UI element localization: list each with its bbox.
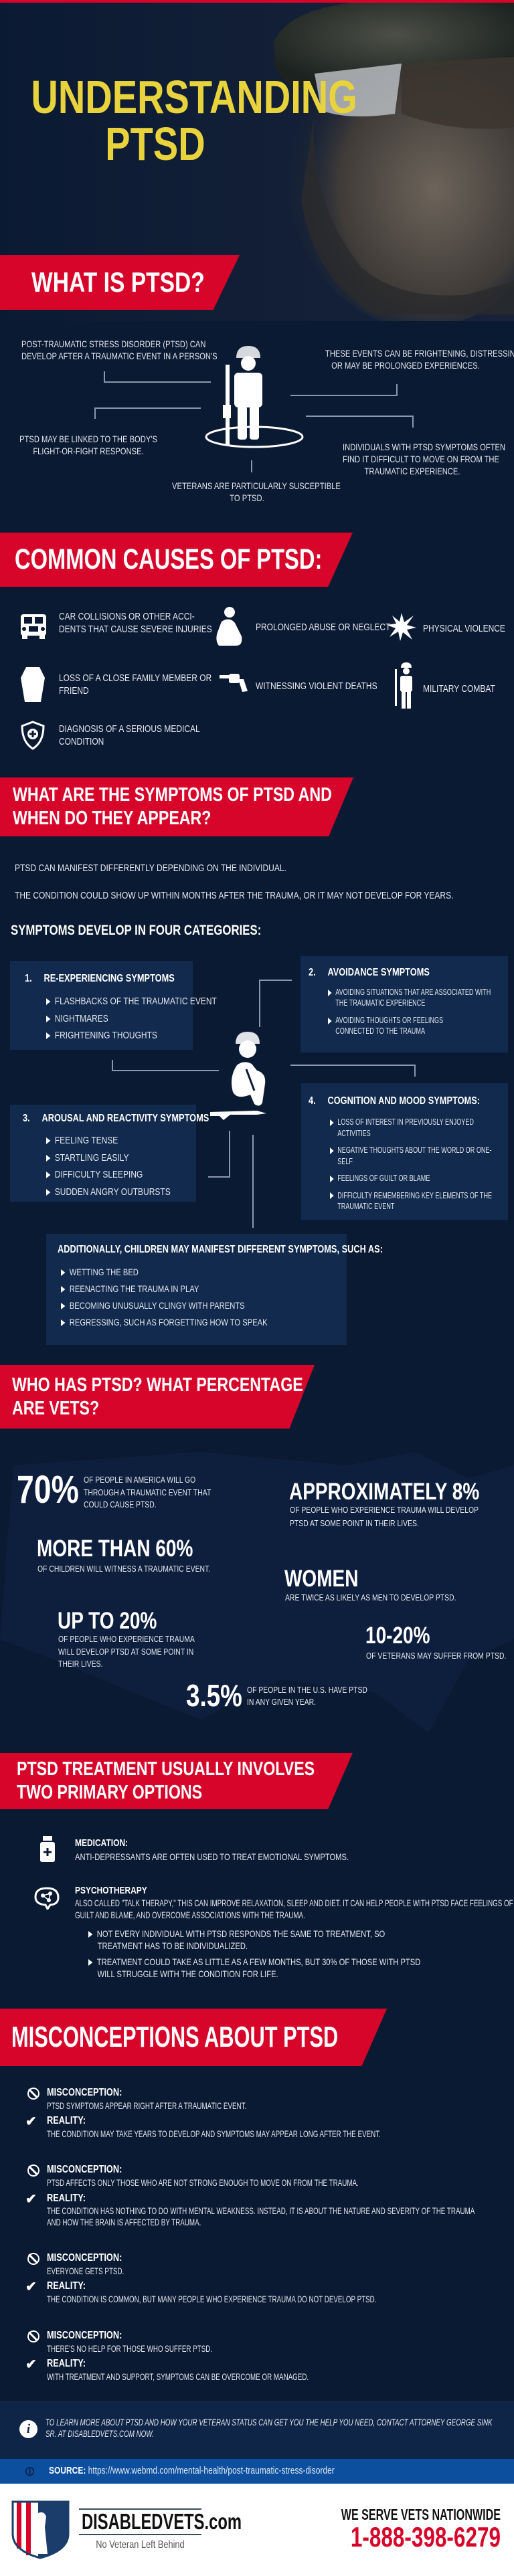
text: difficult to move on: INDIVIDUALS WITH PTSD SYMPTOMS OFTEN: [343, 442, 505, 452]
panel: re-experiencing: NIGHTMARES: [55, 1013, 108, 1024]
icon: brain head: [35, 1887, 59, 1910]
text: difficult to move on: FIND IT DIFFICULT TO MOVE ON FROM THE: [343, 454, 499, 464]
stat: 70%: OF PEOPLE IN AMERICA WILL GO: [84, 1475, 195, 1485]
text: loss: [59, 672, 211, 697]
misconception 4: WITH TREATMENT AND SUPPORT, SYMPTOMS CAN BE OVERCOME OR MANAGED.: [47, 2371, 309, 2382]
text: car collisions: DENTS THAT CAUSE SEVERE INJURIES: [59, 624, 212, 635]
map background: [0, 1452, 514, 1733]
misconception 2: THE CONDITION HAS NOTHING TO DO WITH MENTAL WEAKNESS. INSTEAD, IT IS ABOUT THE NATURE AND SEVERITY OF THE TRAUMA: [47, 2205, 475, 2216]
icon: coffin: [21, 667, 45, 702]
callout: info band: SR. AT DISABLEDVETS.COM NOW.: [46, 2428, 154, 2439]
stat: 3.5%: 3.5%: [186, 1678, 242, 1713]
icon: soldier: [395, 662, 412, 709]
icon: child: [216, 607, 242, 646]
panel: children symptoms: BECOMING UNUSUALLY CLINGY WITH PARENTS: [70, 1300, 245, 1311]
banner: symptoms: [0, 777, 353, 836]
text: definition: POST-TRAUMATIC STRESS DISORDER (PTSD) CAN: [21, 339, 205, 349]
panel: arousal: STARTLING EASILY: [55, 1152, 129, 1163]
icon: car: [21, 614, 46, 639]
text: treatment bullets: [88, 1928, 420, 1979]
text: medication: MEDICATION:: [75, 1837, 128, 1849]
misconception 1: MISCONCEPTION:: [47, 2087, 122, 2098]
stat: 10-20%: 10-20%: [365, 1623, 430, 1649]
text: diagnosis: CONDITION: [59, 736, 104, 747]
text: physical violence: PHYSICAL VIOLENCE: [423, 623, 505, 634]
text: military combat: MILITARY COMBAT: [423, 683, 495, 695]
stat: up to 20%: THEIR LIVES.: [58, 1659, 102, 1669]
icon: revolver: [220, 674, 248, 692]
misconception 2: [25, 2164, 475, 2227]
misconception 1: [25, 2087, 381, 2139]
stat: up to 20%: UP TO 20%: [58, 1608, 157, 1634]
text: psychotherapy: PSYCHOTHERAPY: [75, 1885, 147, 1896]
text: treatment bullets: TREATMENT HAS TO BE INDIVIDUALIZED. TREATMENT COULD TAKE AS LITTLE AS A FEW MONTHS, BUT 30% OF THOSE WITH PTSD: [97, 1940, 420, 1967]
logo: shield: [11, 2500, 70, 2559]
misconception 3: MISCONCEPTION:: [47, 2252, 122, 2264]
panel: what is ptsd diagram: [19, 339, 514, 503]
stat: 70%: [17, 1468, 211, 1511]
misconception 2: PTSD AFFECTS ONLY THOSE WHO ARE NOT STRONG ENOUGH TO MOVE ON FROM THE TRAUMA.: [47, 2177, 359, 2188]
misconception 3: EVERYONE GETS PTSD.: [47, 2266, 124, 2276]
text: loss: LOSS OF A CLOSE FAMILY MEMBER OR: [59, 672, 211, 684]
stat: women: WOMEN: [284, 1566, 358, 1592]
panel: avoidance: AVOIDING SITUATIONS THAT ARE ASSOCIATED WITH: [335, 987, 491, 997]
logo: wordmark: No Veteran Left Behind: [96, 2539, 185, 2551]
logo: wordmark: DISABLEDVETS.com: [82, 2509, 242, 2534]
stat: women: ARE TWICE AS LIKELY AS MEN TO DEVELOP PTSD.: [285, 1592, 456, 1602]
text: car collisions: CAR COLLISIONS OR OTHER ACCI-: [59, 611, 195, 622]
icon: explosion: [387, 613, 416, 641]
footer: [0, 2484, 514, 2576]
logo: wordmark: [79, 2508, 201, 2562]
text: difficult to move on: TRAUMATIC EXPERIENCE.: [365, 466, 460, 476]
banner: misconceptions: [0, 2009, 387, 2066]
stat: 70%: COULD CAUSE PTSD.: [84, 1499, 157, 1509]
panel: children symptoms: ADDITIONALLY, CHILDREN MAY MANIFEST DIFFERENT SYMPTOMS, SUCH AS:: [58, 1244, 383, 1255]
text: symptoms intro: THE CONDITION COULD SHOW UP WITHIN MONTHS AFTER THE TRAUMA, OR IT MAY NOT DEVELOP FOR YEARS.: [15, 890, 453, 901]
heading: four categories: SYMPTOMS DEVELOP IN FOUR CATEGORIES:: [11, 923, 261, 938]
banner: who has ptsd: WHO HAS PTSD? WHAT PERCENTAGE: [12, 1374, 303, 1396]
panel: arousal: SUDDEN ANGRY OUTBURSTS: [55, 1186, 171, 1198]
misconception 1: THE CONDITION MAY TAKE YEARS TO DEVELOP AND SYMPTOMS MAY APPEAR LONG AFTER THE EVENT.: [47, 2128, 381, 2139]
icon: medical shield: [21, 721, 44, 750]
misconception 2: MISCONCEPTION:: [47, 2164, 122, 2175]
panel: cognition and mood: TRAUMATIC EVENT: [337, 1201, 394, 1211]
stat: 10-20%: OF VETERANS MAY SUFFER FROM PTSD.: [366, 1651, 506, 1661]
text: flight or fight: [19, 434, 157, 456]
title: [31, 71, 357, 170]
stat: 3.5%: OF PEOPLE IN THE U.S. HAVE PTSD: [247, 1685, 367, 1695]
stat: approximately 8%: PTSD AT SOME POINT IN THEIR LIVES.: [290, 1518, 419, 1528]
panel: arousal: DIFFICULTY SLEEPING: [55, 1169, 143, 1180]
text: psychotherapy: ALSO CALLED "TALK THERAPY," THIS CAN IMPROVE RELAXATION, SLEEP AND DIET. IT CAN HELP PEOPLE WITH PTSD FACE FEELINGS OF: [75, 1898, 513, 1908]
contact: WE SERVE VETS NATIONWIDE: [341, 2506, 501, 2523]
banner: symptoms: WHEN DO THEY APPEAR?: [13, 808, 211, 829]
stat: more than 60%: [37, 1536, 210, 1574]
banner: treatment: [0, 1753, 353, 1809]
panel: cognition and mood: DIFFICULTY REMEMBERING KEY ELEMENTS OF THE: [337, 1190, 492, 1200]
callout: info band: TO LEARN MORE ABOUT PTSD AND HOW YOUR VETERAN STATUS CAN GET YOU THE HELP YOU NEED, CONTACT ATTORNEY GEORGE SINK: [46, 2417, 493, 2427]
stat: 3.5%: [186, 1678, 367, 1713]
panel: re-experiencing: FLASHBACKS OF THE TRAUMATIC EVENT: [55, 996, 217, 1007]
panel: arousal: FEELING TENSE: [55, 1135, 118, 1146]
panel: avoidance: [301, 956, 508, 1052]
misconception 3: REALITY:: [47, 2280, 86, 2292]
stat: up to 20%: OF PEOPLE WHO EXPERIENCE TRAUMA: [58, 1634, 195, 1644]
misconception 2: ✔: [25, 2192, 37, 2207]
text: symptoms intro: [15, 862, 453, 901]
banner: common causes: [0, 533, 353, 587]
banner: what is ptsd: [0, 255, 240, 310]
text: veterans: TO PTSD.: [230, 492, 264, 503]
panel: children symptoms: REENACTING THE TRAUMA IN PLAY: [70, 1283, 199, 1294]
misconception 3: ✔: [25, 2280, 37, 2294]
text: witnessing deaths: WITNESSING VIOLENT DEATHS: [256, 680, 377, 692]
panel: avoidance: 2. AVOIDANCE SYMPTOMS: [309, 967, 430, 978]
text: psychotherapy: GUILT AND BLAME, AND OVERCOME ASSOCIATIONS WITH THE TRAUMA.: [75, 1910, 305, 1920]
icon: sitting soldier: [210, 1032, 266, 1120]
contact: [268, 2506, 501, 2552]
banner: treatment: PTSD TREATMENT USUALLY INVOLVES: [17, 1758, 315, 1780]
stat: 10-20%: [365, 1623, 506, 1661]
banner: treatment: TWO PRIMARY OPTIONS: [17, 1782, 202, 1803]
text: difficult to move on: [343, 442, 505, 476]
text: veterans: [172, 480, 341, 503]
text: psychotherapy: [75, 1885, 513, 1920]
panel: cognition and mood: 4. COGNITION AND MOOD SYMPTOMS:: [309, 1095, 480, 1107]
stat: women: [284, 1566, 456, 1602]
panel: misconceptions list: [25, 2087, 475, 2382]
misconception 3: THE CONDITION IS COMMON, BUT MANY PEOPLE WHO EXPERIENCE TRAUMA DO NOT DEVELOP PTSD.: [47, 2294, 376, 2304]
source band: SOURCE: https://www.webmd.com/mental-health/post-traumatic-stress-disorder: [49, 2465, 335, 2476]
text: abuse: PROLONGED ABUSE OR NEGLECT: [256, 622, 390, 633]
text: flight or fight: FLIGHT-OR-FIGHT RESPONSE.: [33, 446, 144, 456]
title: PTSD: [105, 118, 205, 170]
panel: re-experiencing: [10, 961, 193, 1050]
misconception 2: REALITY:: [47, 2193, 86, 2204]
stat: more than 60%: MORE THAN 60%: [37, 1536, 193, 1562]
text: flight or fight: PTSD MAY BE LINKED TO THE BODY'S: [19, 434, 157, 444]
misconception 1: ✔: [25, 2114, 37, 2129]
text: diagnosis: DIAGNOSIS OF A SERIOUS MEDICAL: [59, 723, 200, 735]
misconception 1: PTSD SYMPTOMS APPEAR RIGHT AFTER A TRAUMATIC EVENT.: [47, 2100, 246, 2111]
panel: cognition and mood: ACTIVITIES: [337, 1128, 371, 1137]
stat: approximately 8%: [289, 1479, 479, 1528]
text: symptoms intro: PTSD CAN MANIFEST DIFFERENTLY DEPENDING ON THE INDIVIDUAL.: [15, 862, 286, 874]
panel: re-experiencing: 1. RE-EXPERIENCING SYMPTOMS: [25, 973, 175, 984]
text: definition: [21, 339, 218, 361]
stat: 70%: THROUGH A TRAUMATIC EVENT THAT: [84, 1487, 211, 1497]
panel: treatment options: [35, 1836, 513, 1979]
icon: medicine bottle: [40, 1836, 55, 1862]
stat: approximately 8%: OF PEOPLE WHO EXPERIENCE TRAUMA WILL DEVELOP: [290, 1505, 479, 1515]
misconception 4: ✔: [25, 2357, 37, 2372]
title: UNDERSTANDING: [31, 71, 357, 123]
icon: soldier standing: [205, 346, 304, 448]
stat: approximately 8%: APPROXIMATELY 8%: [289, 1479, 479, 1505]
text: events: OR MAY BE PROLONGED EXPERIENCES.: [331, 360, 480, 371]
text: loss: FRIEND: [59, 685, 89, 697]
stat: up to 20%: [58, 1608, 195, 1669]
panel: children symptoms: WETTING THE BED: [70, 1267, 139, 1277]
text: veterans: VETERANS ARE PARTICULARLY SUSCEPTIBLE: [172, 480, 341, 491]
text: medication: [75, 1837, 349, 1862]
panel: cognition and mood: [301, 1083, 508, 1220]
banner: misconceptions: MISCONCEPTIONS ABOUT PTSD: [11, 2021, 338, 2053]
panel: cognition and mood: FEELINGS OF GUILT OR BLAME: [337, 1173, 430, 1183]
contact: 1-888-398-6279: [351, 2521, 501, 2553]
misconception 4: [25, 2329, 427, 2386]
panel: cognition and mood: LOSS OF INTEREST IN PREVIOUSLY ENJOYED: [337, 1117, 474, 1127]
panel: causes: [21, 607, 505, 750]
banner: symptoms: WHAT ARE THE SYMPTOMS OF PTSD AND: [13, 784, 332, 806]
icon: link: ⊘: [21, 2462, 39, 2481]
panel: arousal: 3. AROUSAL AND REACTIVITY SYMPTOMS: [23, 1113, 209, 1124]
panel: avoidance: AVOIDING THOUGHTS OR FEELINGS: [335, 1015, 443, 1025]
text: diagnosis: [59, 723, 200, 747]
misconception 3: [25, 2252, 376, 2304]
stat: 3.5%: IN ANY GIVEN YEAR.: [247, 1697, 316, 1707]
hero photo: soldier: [274, 3, 514, 321]
misconception 4: REALITY:: [47, 2358, 86, 2369]
banner: who has ptsd: [0, 1365, 315, 1429]
panel: avoidance: CONNECTED TO THE TRAUMA: [335, 1026, 425, 1036]
top red stripe: [0, 0, 514, 3]
misconception 4: THERE'S NO HELP FOR THOSE WHO SUFFER PTSD.: [47, 2343, 212, 2354]
text: medication: ANTI-DEPRESSANTS ARE OFTEN USED TO TREAT EMOTIONAL SYMPTOMS.: [75, 1851, 349, 1862]
panel: children symptoms: REGRESSING, SUCH AS FORGETTING HOW TO SPEAK: [70, 1317, 268, 1327]
misconception 1: REALITY:: [47, 2115, 86, 2126]
source band: [0, 2459, 514, 2484]
panel: cognition and mood: NEGATIVE THOUGHTS ABOUT THE WORLD OR ONE-: [337, 1145, 492, 1155]
panel: avoidance: THE TRAUMATIC EXPERIENCE: [335, 998, 425, 1008]
text: car collisions: [59, 611, 212, 635]
panel: arousal: [10, 1105, 196, 1202]
stat: 70%: 70%: [17, 1468, 79, 1511]
banner: what is ptsd: WHAT IS PTSD?: [31, 266, 205, 298]
misconception 4: MISCONCEPTION:: [47, 2330, 122, 2341]
banner: common causes: COMMON CAUSES OF PTSD:: [15, 543, 322, 575]
stat: more than 60%: OF CHILDREN WILL WITNESS A TRAUMATIC EVENT.: [37, 1564, 210, 1574]
banner: who has ptsd: ARE VETS?: [12, 1397, 99, 1418]
panel: re-experiencing: FRIGHTENING THOUGHTS: [55, 1030, 157, 1041]
text: events: [325, 348, 514, 371]
text: treatment bullets: WILL STRUGGLE WITH THE CONDITION FOR LIFE.: [98, 1968, 278, 1979]
text: treatment bullets: NOT EVERY INDIVIDUAL WITH PTSD RESPONDS THE SAME TO TREATMENT, SO: [97, 1928, 385, 1939]
panel: children symptoms: [46, 1234, 347, 1345]
panel: cognition and mood: SELF: [337, 1156, 353, 1166]
stat: up to 20%: WILL DEVELOP PTSD AT SOME POINT IN: [58, 1646, 193, 1657]
misconception 2: AND HOW THE BRAIN IS AFFECTED BY TRAUMA.: [47, 2216, 201, 2227]
callout: info band: [0, 2401, 514, 2459]
text: definition: DEVELOP AFTER A TRAUMATIC EVENT IN A PERSON'S: [21, 351, 218, 361]
icon: info: i: [27, 2422, 30, 2436]
icon: info: [19, 2420, 37, 2438]
